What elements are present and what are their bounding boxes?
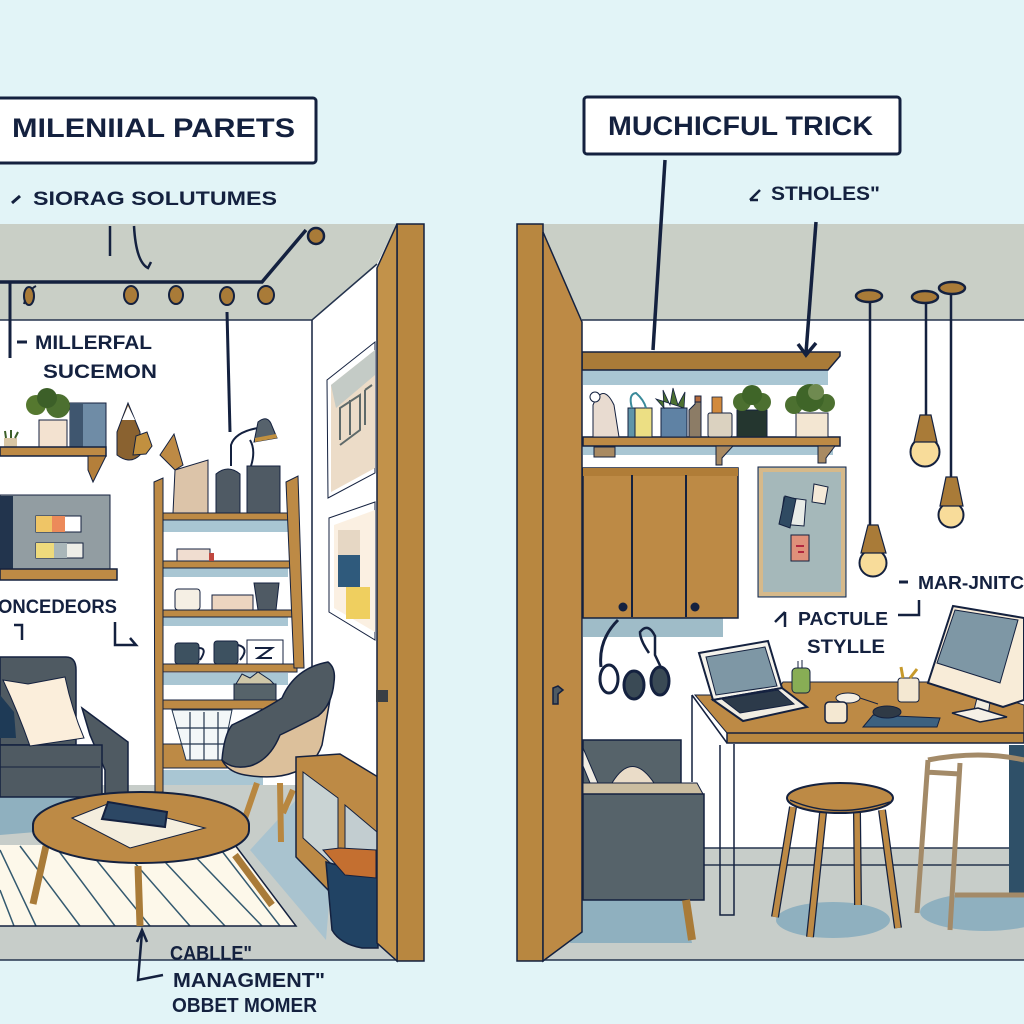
caption: pactule style: STYLLE (807, 637, 885, 658)
pin board (758, 467, 846, 597)
caption: millerfal sucemon: MILLERFAL (35, 333, 152, 354)
heading: right label (584, 97, 900, 154)
right room walls (543, 224, 1024, 960)
desk (692, 660, 1024, 915)
rug (0, 845, 296, 926)
caption: oncedeors: ONCEDEORS (0, 597, 117, 618)
heading: left label (0, 98, 316, 163)
lamp and vases (160, 419, 280, 513)
shelf with plant and books (0, 388, 152, 482)
panel: left room (0, 224, 397, 960)
caption: oncedeors (0, 597, 136, 645)
door: left (376, 224, 424, 961)
caption: millerfal sucemon: SUCEMON (43, 362, 157, 383)
heading: right label: MUCHICFUL TRICK (608, 111, 874, 141)
upper shelf (582, 352, 840, 465)
side cabinet and bin (296, 754, 378, 948)
caption: millerfal sucemon (17, 333, 157, 383)
caption: cable management (137, 930, 325, 1017)
wooden chair (917, 745, 1024, 930)
caption: pactule style (775, 600, 919, 658)
icon: track lights (0, 226, 324, 432)
laptop (699, 641, 807, 721)
arrow: stholes to shelf (798, 222, 816, 355)
wall art (327, 342, 375, 640)
caption: cable management: CABLLE" (170, 943, 252, 965)
stool (775, 783, 898, 937)
coffee table (33, 792, 272, 926)
grey armchair (583, 740, 704, 940)
heading: left label: MILENIIAL PARETS (12, 113, 295, 143)
shelf items and plants (590, 384, 835, 437)
door: right (517, 224, 582, 961)
left room walls (0, 224, 397, 960)
headphones (600, 620, 669, 699)
caption: stholes: STHOLES" (771, 184, 880, 205)
sofa (0, 657, 128, 797)
arrow: label to shelf (653, 160, 665, 350)
bookshelf (154, 476, 304, 792)
caption: cable management: MANAGMENT" (173, 970, 325, 992)
caption: mar-initc: MAR-JNITC (918, 573, 1024, 593)
caption: pactule style: PACTULE (798, 609, 888, 629)
caption: storage solutions: SIORAG SOLUTUMES (33, 189, 277, 210)
caption: cable management: OBBET MOMER (172, 995, 318, 1017)
desktop monitor (928, 606, 1024, 722)
panel: right room (543, 224, 1024, 960)
upper cabinets (583, 468, 738, 618)
armchair (222, 662, 334, 842)
pendant lights (856, 282, 965, 576)
pin board (0, 495, 117, 580)
